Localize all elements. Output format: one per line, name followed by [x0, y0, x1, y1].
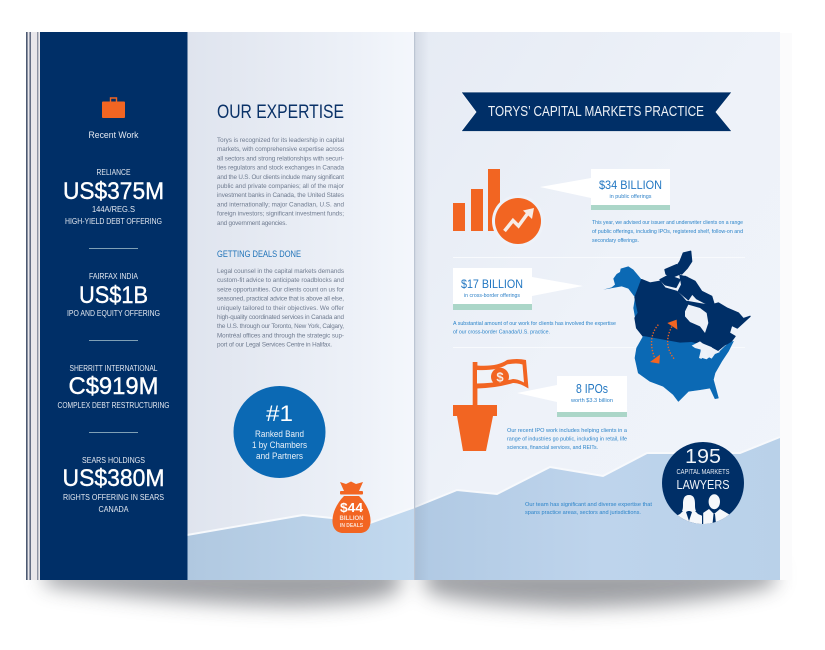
deal: Sears Holdings: CANADA: [98, 505, 129, 514]
map region: Canada: [635, 251, 750, 351]
text block: getting deals done: port of our Legal Services Centre in Halifax.: [217, 342, 332, 349]
callout: 17 billion: [453, 268, 583, 310]
text block: getting deals done: seasoned, practical advice that is above all else,: [217, 296, 344, 303]
arrow: cross-border flows: [650, 320, 677, 364]
text block: getting deals done: uniquely tailored to their objectives. We offer: [217, 305, 344, 312]
deal: Sears Holdings: RIGHTS OFFERING IN SEARS: [63, 493, 164, 502]
map region: west coast sliver: [633, 297, 639, 317]
page stack edge: left: [26, 32, 40, 580]
deal: Fairfax India: [67, 272, 160, 318]
callout: 17 billion: $17 BILLION: [461, 277, 523, 291]
text block: cross-border: [453, 321, 616, 336]
callout: ranked number one: [234, 386, 326, 478]
deal: Reliance: RELIANCE: [96, 168, 130, 177]
text block: expertise intro: [217, 137, 344, 227]
deal: Fairfax India: IPO AND EQUITY OFFERING: [67, 309, 160, 318]
text block: expertise intro: investment banks in Canada, the United States: [217, 192, 344, 199]
text block: public offerings: [592, 220, 743, 244]
text block: getting deals done: seize opportunities. Our clients count on us for: [217, 286, 344, 293]
icon: money bag: [332, 482, 371, 533]
page stack edge: right: [780, 33, 792, 580]
callout: 34 billion: [540, 169, 670, 210]
text block: public offerings: of public offerings, including IPOs, registered shelf, follow-on and: [592, 229, 743, 235]
icon: briefcase: [102, 98, 125, 118]
deal: Sherritt International: C$919M: [68, 373, 158, 400]
callout: 34 billion: in public offerings: [610, 194, 652, 200]
map region: Great Lakes: [692, 341, 720, 359]
icon: money bag: BILLION: [340, 516, 364, 522]
callout: 195 lawyers: CAPITAL MARKETS: [676, 469, 730, 476]
text block: public offerings: This year, we advised our issuer and underwriter clients on a range: [592, 220, 743, 226]
callout: 195 lawyers: [662, 442, 744, 530]
sidebar heading: Recent Work: [88, 130, 139, 141]
callout: 8 IPOs: [517, 376, 627, 417]
text block: getting deals done: Legal counsel in the capital markets demands: [217, 268, 344, 275]
text block: getting deals done: [217, 268, 344, 349]
text block: team: spans practice areas, sectors and jurisdictions.: [525, 510, 641, 516]
text block: team: Our team has significant and diverse expertise that: [525, 502, 652, 508]
callout: 8 IPOs: worth $3.3 billion: [570, 398, 613, 404]
icon: two lawyers: [678, 494, 730, 524]
text block: IPO work: Our recent IPO work includes helping clients in a: [507, 428, 628, 434]
map region: Hudson Bay: [685, 305, 708, 333]
text block: expertise intro: and government agencies.: [217, 220, 287, 227]
callout: 195 lawyers: 195: [685, 446, 721, 468]
deal: Sherritt International: [58, 364, 170, 410]
deal: Sherritt International: SHERRITT INTERNATIONAL: [70, 364, 158, 373]
text block: getting deals done: Montréal offices and through the strategic sup-: [217, 332, 344, 339]
text block: IPO work: range of industries go public, including in retail, life: [507, 436, 627, 442]
deal: Sherritt International: COMPLEX DEBT RESTRUCTURING: [58, 401, 170, 410]
icon: flag in pot: [453, 359, 528, 451]
panel: recent work sidebar: [40, 32, 188, 580]
right page hill: [415, 437, 780, 580]
left page background: [187, 32, 415, 580]
deal: Reliance: [63, 168, 164, 226]
text block: public offerings: secondary offerings.: [592, 238, 639, 244]
deal: Reliance: US$375M: [63, 178, 164, 205]
text block: getting deals done: custom-fit advice to anticipate roadblocks and: [217, 277, 344, 284]
text block: expertise intro: markets, with comprehensive expertise across: [217, 146, 344, 153]
text block: expertise intro: foreign investors; significant investment funds;: [217, 211, 344, 218]
text block: team: [525, 502, 652, 516]
deal: Reliance: HIGH-YIELD DEBT OFFERING: [65, 217, 162, 226]
icon: money bag: $44: [340, 500, 364, 515]
text block: expertise intro: ties regulators and stock exchanges in Canada: [217, 165, 344, 172]
deal: Fairfax India: FAIRFAX INDIA: [89, 272, 139, 281]
deal: Sears Holdings: SEARS HOLDINGS: [82, 456, 145, 465]
map region: Alaska: [603, 266, 642, 297]
title banner: [461, 92, 732, 132]
callout: ranked number one: 1 by Chambers: [252, 440, 307, 450]
text block: cross-border: of our cross-border Canada/U.S. practice.: [453, 330, 550, 336]
deal: Fairfax India: US$1B: [79, 282, 148, 309]
callout: 8 IPOs: 8 IPOs: [576, 382, 608, 396]
book shadow: [45, 565, 775, 608]
callout: 17 billion: in cross-border offerings: [464, 293, 520, 299]
icon: money bag: IN DEALS: [340, 523, 363, 529]
title banner: TORYS’ CAPITAL MARKETS PRACTICE: [488, 104, 704, 120]
right page background: [415, 32, 780, 580]
text block: getting deals done: high-quality coordinated services in Canada and: [217, 314, 344, 321]
callout: ranked number one: #1: [266, 401, 293, 426]
text block: expertise intro: public and private companies; all of the major: [217, 183, 344, 190]
text block: IPO work: [507, 428, 628, 451]
deal: Sears Holdings: US$380M: [62, 465, 164, 492]
deal: Sears Holdings: [62, 456, 164, 514]
text block: cross-border: A substantial amount of our work for clients has involved the expertise: [453, 321, 616, 327]
heading: our expertise: OUR EXPERTISE: [217, 102, 344, 123]
text block: expertise intro: and the U.S. Our clients include many significant: [217, 174, 344, 181]
heading: getting deals done: GETTING DEALS DONE: [217, 249, 301, 260]
callout: ranked number one: and Partners: [256, 451, 303, 461]
text block: expertise intro: all sectors and strong relationships with securi-: [217, 155, 344, 162]
deal: Reliance: 144A/REG.S: [92, 205, 135, 214]
icon: bar chart with growth arrow: [453, 169, 544, 247]
book spine shading: [414, 32, 429, 580]
text block: expertise intro: and internationally; major Canadian, U.S. and: [217, 201, 344, 208]
callout: 195 lawyers: LAWYERS: [676, 478, 730, 492]
map region: United States: [635, 336, 733, 401]
callout: ranked number one: Ranked Band: [255, 429, 304, 439]
map: Canada and United States: [603, 251, 750, 401]
text block: IPO work: sciences, financial services, and REITs.: [507, 445, 598, 451]
left page hill: [187, 507, 415, 580]
callout: 34 billion: $34 BILLION: [599, 178, 662, 192]
text block: expertise intro: Torys is recognized for its leadership in capital: [217, 137, 344, 144]
text block: getting deals done: the U.S. through our Toronto, New York, Calgary,: [217, 323, 344, 330]
icon: flag in pot: $: [496, 370, 504, 384]
